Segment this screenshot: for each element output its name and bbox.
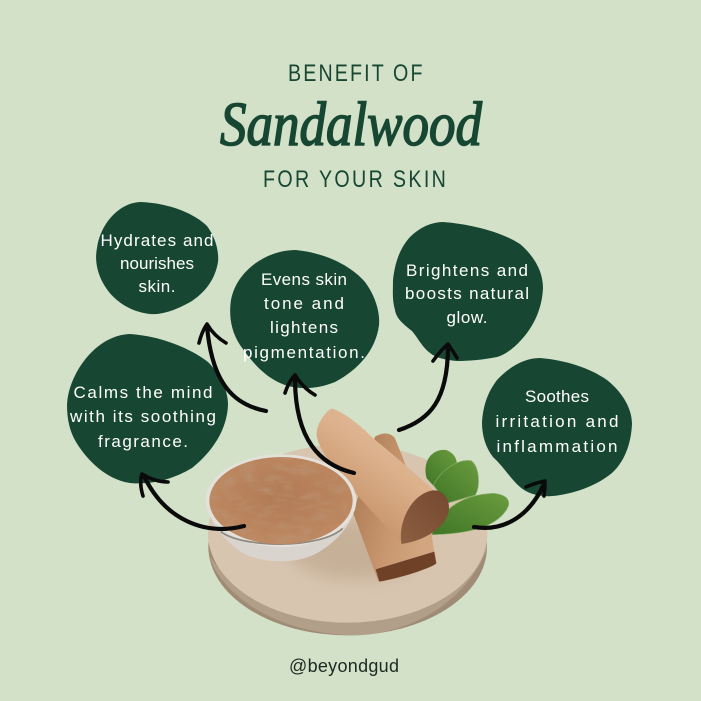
arrow: to calms the mind bbox=[141, 474, 244, 529]
heading: Sandalwood: Sandalwood bbox=[220, 91, 483, 159]
arrow: to brightens bbox=[399, 344, 457, 430]
sandalwood paste bbox=[209, 457, 353, 544]
silver bowl bbox=[206, 454, 356, 561]
wood log, rear bbox=[353, 433, 436, 582]
blob: hydrates and nourishes skin: nourishes bbox=[120, 254, 194, 273]
blob: evens skin tone: lightens bbox=[270, 318, 338, 337]
heading: for your skin: FOR YOUR SKIN bbox=[263, 165, 446, 192]
arrow: to evens skin tone bbox=[285, 375, 354, 473]
handle: @beyondgud: @beyondgud bbox=[289, 656, 399, 676]
blob: calms the mind bbox=[67, 334, 228, 483]
blob: brightens and boosts natural glow: boosts natural bbox=[405, 284, 529, 303]
arrow: to hydrates bbox=[199, 324, 266, 411]
wooden disc bbox=[208, 444, 487, 635]
blob: soothes irritation and inflammation: inflammation bbox=[496, 437, 618, 456]
blob: evens skin tone: pigmentation. bbox=[243, 343, 365, 362]
blob: evens skin tone: tone and bbox=[264, 294, 344, 313]
blob: soothes irritation and inflammation: Soothes bbox=[525, 387, 589, 406]
leaves bbox=[425, 450, 509, 535]
wood log, front bbox=[317, 408, 449, 544]
blob: brightens and boosts natural glow: glow. bbox=[446, 308, 488, 327]
blob: calms the mind: Calms the mind bbox=[74, 383, 212, 402]
arrow: to soothes bbox=[474, 481, 545, 528]
blob: calms the mind: fragrance. bbox=[98, 432, 188, 451]
blob: calms the mind: with its soothing bbox=[69, 407, 216, 426]
illustration: sandalwood paste, logs and leaves on wooden disc bbox=[206, 408, 509, 635]
blob: soothes irritation and inflammation bbox=[482, 358, 632, 496]
blob: hydrates and nourishes skin: Hydrates and bbox=[100, 231, 214, 250]
blob: evens skin tone bbox=[230, 250, 379, 388]
blob: evens skin tone: Evens skin bbox=[261, 270, 347, 289]
heading: benefit of: BENEFIT OF bbox=[288, 59, 422, 86]
blob: hydrates and nourishes skin bbox=[96, 202, 218, 314]
title block bbox=[220, 59, 483, 192]
blob: brightens and boosts natural glow: Brightens and bbox=[406, 261, 528, 280]
blob: brightens and boosts natural glow bbox=[393, 222, 543, 361]
blob: hydrates and nourishes skin: skin. bbox=[138, 277, 176, 296]
blob: soothes irritation and inflammation: irritation and bbox=[496, 412, 618, 431]
